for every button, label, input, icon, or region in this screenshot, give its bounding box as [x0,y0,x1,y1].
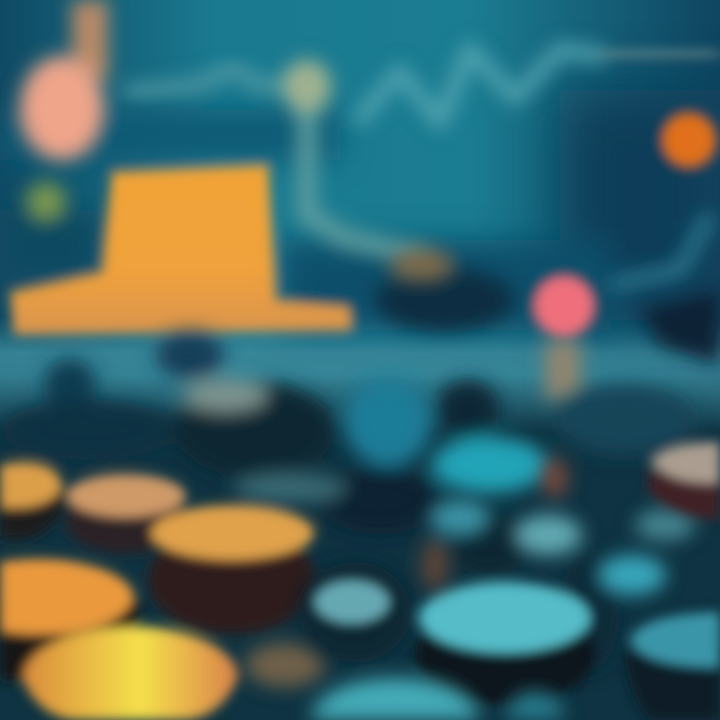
coin: small teal group [421,458,695,595]
line chart: pillar and step line [283,60,420,255]
orange coins: left stacks [0,462,325,720]
background shading patches [0,90,720,330]
coin: small brown [245,643,325,687]
icon: red marker pin [534,276,594,400]
coin: far left small [0,462,68,540]
coin: bottom centre glow [310,678,565,720]
coin: second left [65,474,186,554]
middle row: dark coin stacks [2,331,695,670]
dark mound behind the marker [375,215,720,365]
teal coins: right stacks [299,442,720,720]
line chart: upper trend lines [130,0,720,122]
coin: large teal [415,582,595,705]
coin: lower left [0,559,140,680]
coin: pale right [648,442,720,520]
bar chart: orange stepped block [10,165,352,335]
coin: large centre [148,505,316,634]
icon: orange circle [662,113,716,167]
icon: pink balloon with stem [20,0,108,222]
coin: yellow bottom [22,626,238,720]
coin: bottom right [625,612,720,720]
coin: centre teal [299,562,411,662]
